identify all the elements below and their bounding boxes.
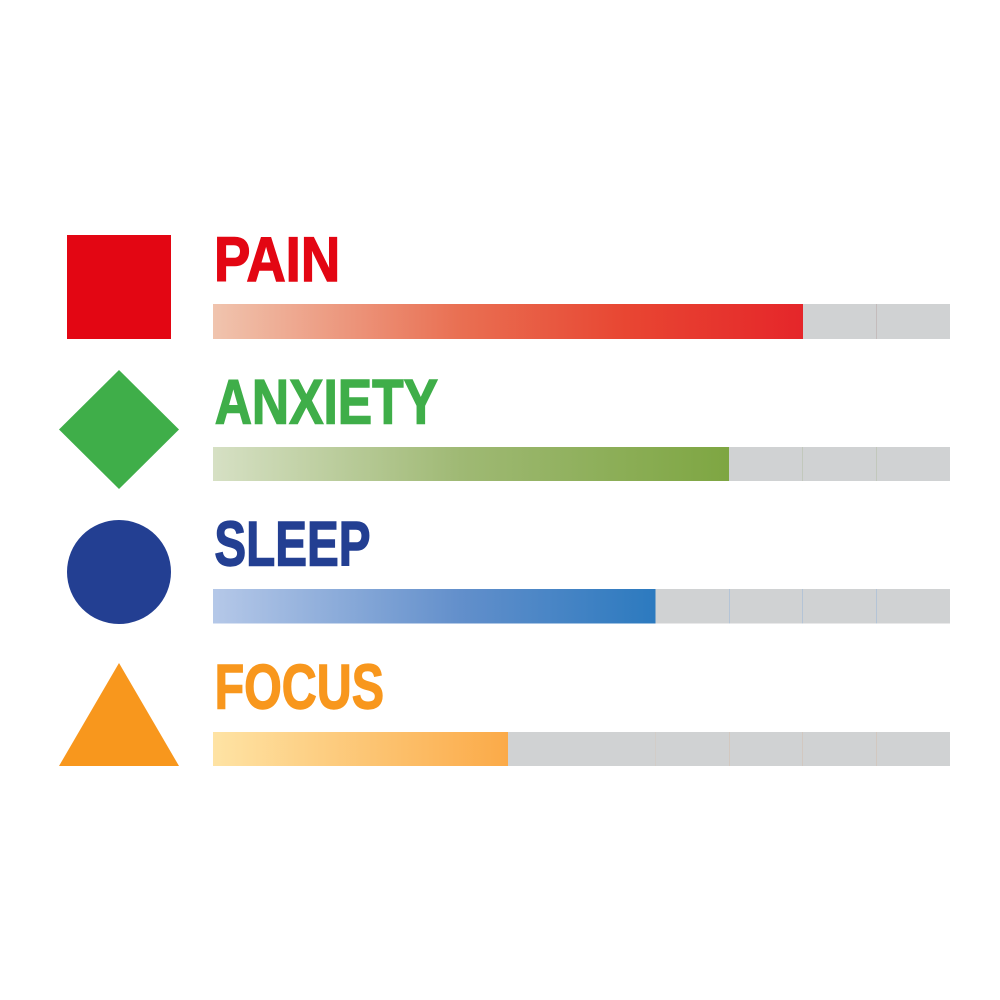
icon: green diamond — [59, 370, 179, 489]
icon: blue circle — [67, 520, 171, 624]
heading: pain: PAIN — [214, 225, 340, 295]
heading: focus: FOCUS — [215, 652, 384, 722]
bar: sleep — [213, 589, 950, 624]
row: pain — [67, 225, 950, 339]
icon: red square — [67, 235, 171, 339]
heading: sleep: SLEEP — [214, 510, 370, 580]
bar: focus — [213, 732, 950, 766]
bar: anxiety — [213, 447, 950, 481]
row: sleep — [67, 510, 950, 624]
heading: anxiety: ANXIETY — [215, 367, 438, 437]
row: anxiety — [59, 367, 950, 489]
icon: orange triangle — [59, 663, 179, 766]
row: focus — [59, 652, 950, 766]
bar: pain — [213, 304, 950, 339]
